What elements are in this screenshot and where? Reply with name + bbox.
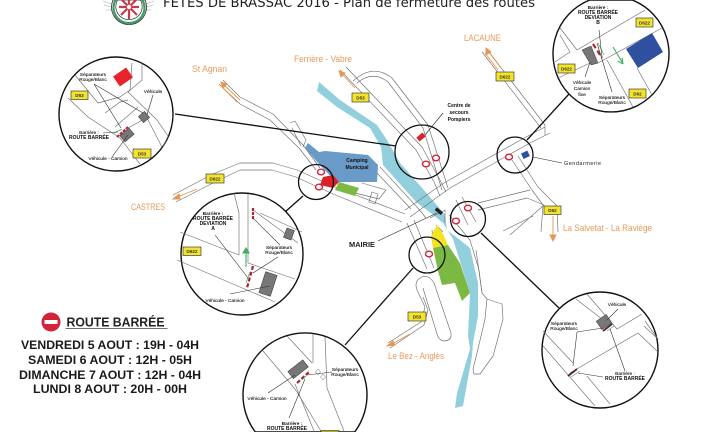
panel: zoom circle deviation B: ROUTE BARRÉE (578, 8, 619, 16)
panel: zoom circle D53 west: Rouge/Blanc (79, 77, 107, 83)
closure schedule: VENDREDI 5 AOUT : 19H - 04H (21, 338, 199, 352)
road signs on main map: D622 (210, 176, 221, 182)
panel: zoom circle deviation A: A (211, 226, 215, 232)
road signs on main map: D53 (413, 314, 422, 320)
connector lines between zoom circles (175, 94, 569, 345)
panel: zoom circle D53 west (59, 57, 173, 171)
panel: zoom circle D53 south: Rouge/Blanc (331, 372, 359, 378)
green parking zone (335, 182, 359, 196)
destination labels: Ferrière - Vabre (294, 54, 352, 65)
panel: zoom circle deviation A: Séparateurs (266, 245, 293, 251)
panel: zoom circle deviation A: D622 (187, 249, 198, 254)
truck (120, 128, 134, 142)
logo: Occitan cross emblem (103, 0, 154, 25)
panel: zoom circle deviation B: D622 (639, 20, 650, 26)
blue building (626, 33, 663, 68)
gendarmerie building (521, 151, 530, 159)
fire station label: Pompiers (448, 117, 471, 123)
barrier (593, 44, 602, 58)
small locator circles (298, 125, 533, 273)
green zone by the river (433, 245, 470, 301)
river (317, 82, 478, 408)
panel: zoom circle deviation B: DEVIATION (585, 15, 612, 21)
mairie building (435, 207, 443, 215)
fire station label: secours (449, 110, 469, 116)
panel: zoom circle deviation B: fixe (578, 92, 586, 98)
vehicle (284, 228, 294, 240)
panel: zoom circle D53 south: Barrière : (282, 421, 303, 426)
red closure zone (320, 175, 339, 188)
legend: route barree: ROUTE BARRÉE (66, 314, 164, 330)
destination labels: CASTRES (131, 202, 165, 213)
road network (173, 48, 558, 374)
panel: zoom circle deviation A (177, 193, 303, 315)
panel: zoom circle south east: Véhicule (608, 302, 627, 308)
panel: zoom circle deviation B: Séparateurs (599, 95, 626, 101)
panel: zoom circle D53 west: Séparateurs (80, 72, 107, 78)
panel: zoom circle deviation B: D62 (633, 92, 642, 96)
panel: zoom circle deviation A: Véhicule - Camion (205, 298, 245, 304)
panel: zoom circle D53 west: D53 (138, 152, 147, 156)
panel: zoom circle D53 west: ROUTE BARRÉE (69, 133, 110, 141)
vehicle (596, 314, 612, 330)
truck (259, 272, 277, 296)
fire station building (416, 133, 426, 141)
panel: zoom circle D53 west: D53 (75, 93, 84, 98)
destination labels: LACAUNE (464, 33, 501, 44)
panel: zoom circle south east: Séparateurs (551, 321, 578, 327)
upper barrier (603, 324, 612, 331)
destination labels: La Salvetat - La Raviège (563, 223, 652, 234)
barriers (252, 208, 254, 219)
fire station label: Centre de (447, 103, 471, 109)
green arrow (243, 248, 249, 267)
closure schedule: DIMANCHE 7 AOUT : 12H - 04H (19, 368, 201, 382)
yellow zone (431, 225, 448, 248)
panel: zoom circle deviation B: B (596, 20, 600, 26)
destination labels: Le Bez - Anglès (388, 351, 444, 362)
panel: zoom circle deviation B: Camion (574, 86, 591, 92)
icon: no entry (42, 312, 60, 332)
panel: zoom circle deviation A: ROUTE BARRÉE (193, 214, 234, 222)
closure schedule: SAMEDI 6 AOUT : 12H - 05H (28, 353, 192, 367)
barrier (117, 127, 128, 137)
panel: zoom circle D53 west: Véhicule - Camion (88, 156, 128, 162)
separators (316, 369, 326, 380)
panel: zoom circle south east (542, 292, 658, 408)
panel: zoom circle deviation A: DEVIATION (200, 221, 227, 227)
truck (288, 360, 308, 379)
panel: zoom circle deviation B: Véhicule (573, 80, 592, 86)
vehicle (138, 111, 150, 123)
lower barrier (568, 369, 577, 376)
panel: zoom circle D53 south: Véhicule - Camion (247, 396, 287, 402)
road signs on main map (206, 72, 561, 321)
camping municipal zone (305, 143, 378, 182)
panel: zoom circle deviation B: Barrière : (588, 5, 609, 10)
truck (582, 46, 598, 65)
green arrow (613, 47, 623, 64)
red building (113, 67, 133, 87)
panel: zoom circle deviation B: Rouge/Blanc (598, 100, 626, 106)
no entry markers on map (316, 154, 512, 257)
panel: zoom circle deviation B: D622 (561, 66, 572, 72)
legend: route barree (42, 312, 168, 332)
road signs on main map: D53 (356, 96, 365, 100)
mairie label: MAIRIE (349, 240, 375, 249)
panel: zoom circle deviation A: Barrière : (203, 211, 224, 216)
closure schedule: LUNDI 8 AOUT : 20H - 00H (33, 382, 187, 396)
panel: zoom circle D53 west: Barrière : (79, 130, 99, 136)
barrier (297, 372, 309, 383)
road signs on main map: D622 (500, 74, 511, 80)
destination labels (131, 33, 652, 362)
panel: zoom circle south east: Rouge/Blanc (550, 326, 578, 332)
panel: zoom circle D53 south: ROUTE BARRÉE (267, 424, 308, 432)
gendarmerie label: Gendarmerie (564, 161, 601, 167)
panel: zoom circle south east: ROUTE BARRÉE (605, 374, 646, 382)
fire station label (425, 103, 471, 135)
panel: zoom circle D53 west: Véhicule (144, 89, 163, 95)
direction arrows (173, 48, 556, 346)
panel: zoom circle D53 south (243, 333, 367, 432)
panel: zoom circle D53 south: Séparateurs (332, 367, 359, 373)
closure schedule (19, 338, 201, 396)
mairie label (349, 213, 437, 249)
panel: zoom circle deviation A: Rouge/Blanc (265, 250, 293, 256)
panel: zoom circle deviation B (553, 0, 669, 112)
camping municipal zone: Camping (346, 158, 368, 164)
gendarmerie label (533, 157, 601, 167)
panel: zoom circle south east: Barrière : (615, 371, 635, 377)
road signs on main map: D62 (548, 208, 557, 213)
camping municipal zone: Municipal (345, 165, 369, 171)
destination labels: St Agnan (192, 64, 227, 75)
